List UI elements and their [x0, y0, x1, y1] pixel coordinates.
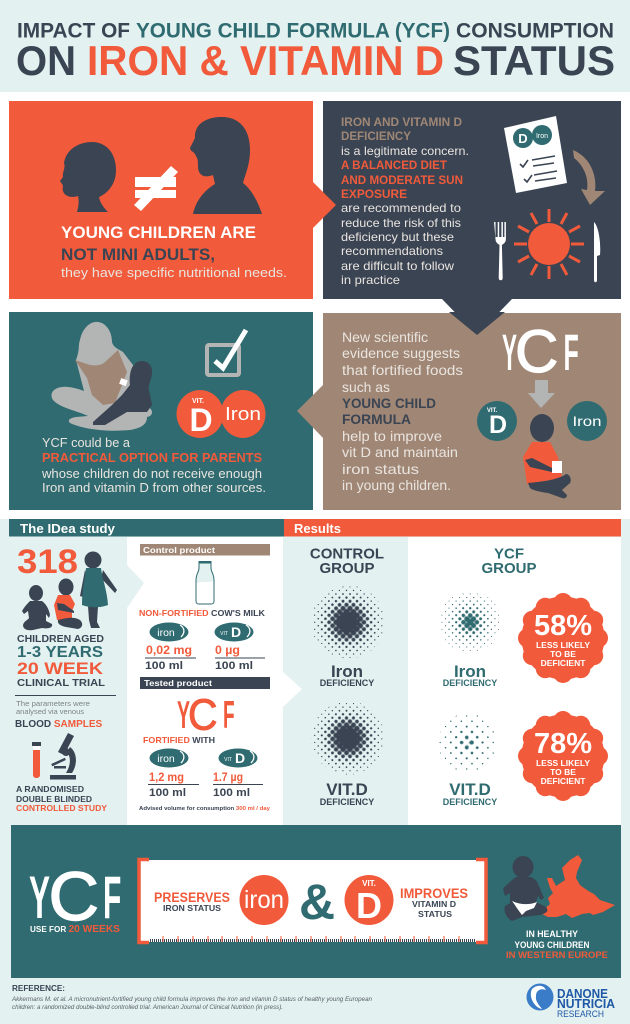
panel text: are recommended to: [341, 201, 461, 215]
heading: control group: [310, 546, 384, 577]
text: clinical trial: CLINICAL TRIAL: [17, 677, 106, 689]
pill: vit D tested: [218, 748, 258, 768]
dose: tested iron: 1,2 mg: [149, 770, 184, 784]
logo: YCF: Y: [502, 325, 517, 382]
pill: vit D: VIT: [220, 631, 228, 637]
dose: control vitamin D: [215, 643, 265, 672]
text: in healthy young children: IN HEALTHY: [526, 929, 579, 940]
dose: control vitamin D: 0 µg: [215, 643, 240, 657]
panel text: Iron and vitamin D from other sources.: [42, 481, 266, 495]
text: randomised study: DOUBLE BLINDED: [16, 794, 92, 804]
text: parameters note: BLOOD SAMPLES: [15, 719, 103, 730]
panel text: is a legitimate concern.: [341, 144, 469, 158]
text: non-fortified milk: NON-FORTIFIED COW'S MILK: [139, 608, 266, 618]
icon: checklist paper: Iron: [536, 133, 548, 140]
text: iron deficiency: Iron: [331, 662, 363, 681]
icon: mother and child: [51, 322, 152, 431]
badge: 58 percent: TO BE: [550, 649, 576, 659]
ampersand: &: [299, 874, 335, 930]
text: randomised study: A RANDOMISED: [16, 784, 84, 794]
panel text: are difficult to follow: [341, 259, 454, 273]
panel text: [61, 223, 287, 280]
panel text: in young children.: [342, 477, 451, 493]
text: advised volume: Advised volume for consumption 300 ml / day: [139, 806, 271, 812]
icon: blood tube: [32, 742, 41, 778]
heading: tested product: Tested product: [144, 678, 212, 688]
heading: control product: [140, 544, 270, 556]
icon: fork: [494, 222, 506, 280]
icon: seated child with cup: [523, 414, 571, 498]
text: vit D deficiency: [320, 780, 374, 807]
panel text: NOT MINI ADULTS,: [61, 245, 215, 264]
panel text: [41, 436, 266, 495]
stat: 318: 318: [17, 543, 78, 581]
logo: YCF orange: [177, 691, 235, 740]
text: in healthy young children: [506, 929, 608, 961]
halftone: YCF vitamin D: [438, 713, 498, 773]
logo: YCF: F: [564, 323, 579, 381]
arrow: column pointer: [127, 565, 144, 608]
text: iron deficiency: [320, 662, 374, 688]
pill: vit D tested: VIT: [224, 757, 232, 763]
panel text: evidence suggests: [342, 345, 460, 361]
panel: practical option: [9, 312, 313, 510]
pill: iron: [150, 622, 188, 642]
panel text: FORMULA: [342, 411, 411, 427]
logo: YCF orange: F: [223, 694, 235, 737]
text: 20 week: 20 WEEK: [17, 659, 104, 678]
dose: tested vitamin D: [213, 770, 263, 799]
title: IMPACT OF: [17, 20, 130, 42]
text: vit D deficiency: VIT.D: [326, 780, 368, 799]
logo: YCF white: [29, 857, 121, 935]
panel text: EXPOSURE: [341, 187, 407, 201]
text: randomised study: CONTROLLED STUDY: [16, 803, 107, 813]
panel text: A BALANCED DIET: [341, 158, 448, 172]
logo: YCF white: Y: [29, 865, 50, 932]
title: STATUS: [453, 37, 615, 84]
badge: 78 percent: 78%: [534, 728, 592, 760]
badge: 58 percent: DEFICIENT: [541, 658, 586, 668]
logo: YCF: C: [515, 318, 558, 385]
title: [16, 20, 615, 84]
icon: milk bottle: [196, 561, 214, 604]
panel text: in practice: [341, 273, 400, 287]
text: improves vitamin D status: STATUS: [418, 909, 452, 919]
pill: iron tested: [150, 748, 188, 768]
text: improves vitamin D status: [400, 886, 468, 919]
panel: scientific evidence: [297, 312, 621, 510]
text: iron deficiency: Iron: [454, 662, 486, 681]
text: randomised study: [16, 784, 107, 813]
icon: checklist paper: [504, 116, 567, 193]
panel text: [341, 115, 469, 287]
title: ON: [16, 37, 76, 84]
pill: iron tested: iron: [157, 753, 175, 765]
icon: baby: [503, 856, 547, 921]
section background: study: [0, 519, 630, 825]
icon: checklist paper: D: [518, 131, 528, 146]
text: vit D deficiency: DEFICIENCY: [443, 797, 497, 807]
heading: control group: GROUP: [319, 560, 375, 577]
text: improves vitamin D status: IMPROVES: [400, 886, 468, 901]
heading: the IDea study: The IDea study: [20, 522, 115, 536]
heading: results: [284, 519, 621, 536]
logo: Danone Nutricia Research: DANONE: [557, 986, 608, 1001]
icon: iron circle: iron: [244, 886, 284, 914]
text: preserves iron status: [154, 890, 230, 913]
panel text: IRON AND VITAMIN D: [341, 115, 462, 129]
title: YOUNG CHILD FORMULA (YCF): [136, 20, 450, 42]
study population column: [15, 543, 117, 813]
section background: conclusion and footer: [0, 825, 630, 1024]
icon: iron circle: Iron: [572, 413, 602, 429]
icon: vit D circle: D: [489, 411, 507, 439]
text: vit D deficiency: [443, 780, 497, 807]
icon: vit D circle: VIT.: [487, 408, 497, 414]
badge: 58 percent: [518, 593, 608, 683]
dose: tested iron: [148, 770, 199, 799]
arrow: down pointer: [442, 299, 512, 335]
text: parameters note: The parameters were: [16, 699, 90, 708]
badge: 78 percent: [518, 711, 608, 801]
logo: YCF white: F: [103, 865, 121, 932]
panel text: PRACTICAL OPTION FOR PARENTS: [42, 451, 262, 465]
panel text: recommendations: [341, 244, 443, 258]
icon: vit D circle: [344, 875, 394, 926]
panel text: vit D and maintain: [342, 444, 458, 460]
text: iron deficiency: DEFICIENCY: [443, 678, 497, 688]
icon: three children: [22, 552, 117, 630]
panel text: help to improve: [342, 428, 442, 444]
panel text: YOUNG CHILD: [342, 395, 436, 411]
header band: [0, 0, 630, 92]
badge: 78 percent: DEFICIENT: [541, 776, 586, 786]
panel text: YOUNG CHILDREN ARE: [61, 223, 256, 242]
panel text: deficiency but these: [341, 230, 454, 244]
arrow: right pointer from first panel: [313, 182, 336, 228]
logo: Danone Nutricia Research: RESEARCH: [557, 1009, 604, 1019]
arrow: dark pointer tip overlay: [449, 312, 505, 335]
text: fortified with: FORTIFIED WITH: [143, 735, 215, 745]
logo: YCF orange: Y: [177, 693, 190, 737]
title: CONSUMPTION: [456, 20, 614, 42]
arrow: left pointer: [297, 385, 323, 438]
text: iron deficiency: DEFICIENCY: [320, 678, 374, 688]
text: improves vitamin D status: VITAMIN D: [412, 899, 456, 909]
reference: REFERENCE:: [12, 984, 65, 993]
heading: YCF group: GROUP: [481, 560, 537, 577]
pill: iron: iron: [157, 627, 175, 639]
reference: children: a randomized double-blind controlled trial. American Journal of Clinical Nutrition (in press).: [12, 1005, 283, 1011]
text: vit D deficiency: VIT.D: [449, 780, 491, 799]
panel text: AND MODERATE SUN: [341, 173, 463, 187]
dose: tested vitamin D: 1.7 µg: [213, 770, 243, 784]
white column: YCF results: [408, 537, 621, 825]
icon: adult head silhouette: [190, 117, 262, 214]
logo: YCF white: C: [48, 857, 99, 935]
panel text: they have specific nutritional needs.: [61, 265, 287, 280]
heading: YCF group: [481, 546, 537, 577]
panel text: reduce the risk of this: [341, 216, 461, 230]
results: control group: [310, 546, 385, 807]
badge: 58 percent: 58%: [534, 610, 592, 642]
icon: not equal sign: [134, 166, 178, 211]
halftone: control iron: [311, 585, 385, 659]
arrow: gray down arrow: [528, 380, 555, 408]
dose: control iron: 100 ml: [145, 660, 183, 672]
icon: vit D and iron circles: D: [189, 402, 213, 438]
panel text: YCF could be a: [42, 436, 130, 450]
dose: control iron: 0,02 mg: [146, 643, 192, 657]
icon: iron circle: [240, 875, 288, 925]
text: in healthy young children: YOUNG CHILDREN: [514, 940, 590, 951]
panel text: DEFICIENCY: [341, 129, 411, 143]
arrow: curved down arrow: [573, 150, 605, 205]
panel: deficiency concern: [313, 101, 621, 335]
icon: vit D circle: [477, 401, 517, 441]
icon: iron circle: [567, 401, 607, 441]
dose: control iron: [145, 643, 196, 672]
panel text: [342, 329, 463, 493]
icon: sun: [514, 209, 584, 279]
panel text: New scientific: [342, 329, 428, 345]
reference: Akkermans M. et al. A micronutrient-fortified young child formula improves the iron and vitamin D status of healthy young European: [11, 997, 373, 1003]
text: 1-3 years: 1-3 YEARS: [17, 644, 103, 661]
panel text: whose children do not receive enough: [41, 467, 262, 481]
text: parameters note: [15, 699, 103, 730]
logo: YCF orange: C: [188, 691, 218, 740]
white column: products: [127, 537, 283, 825]
text: use for 20 weeks: USE FOR 20 WEEKS: [30, 924, 120, 935]
heading: YCF group: YCF: [494, 546, 524, 562]
dose: tested vitamin D: 100 ml: [213, 787, 250, 799]
badge: 78 percent: TO BE: [550, 767, 576, 777]
product column: [139, 544, 271, 812]
icon: vit D circle: D: [356, 885, 382, 926]
icon: checkbox: [207, 330, 246, 375]
text: vit D deficiency: DEFICIENCY: [320, 797, 374, 807]
icon: vit D and iron circles: VIT.: [192, 398, 204, 405]
panel text: that fortified foods: [342, 362, 463, 378]
pill: vit D: [214, 622, 254, 642]
badge: 58 percent: LESS LIKELY: [536, 640, 590, 650]
dose: tested iron: 100 ml: [149, 787, 186, 799]
panel text: iron status: [342, 461, 419, 477]
panel: conclusion: [11, 825, 621, 978]
text: preserves iron status: IRON STATUS: [163, 903, 221, 913]
heading: control group: CONTROL: [310, 546, 384, 562]
icon: vit D and iron circles: [176, 390, 266, 438]
heading: control product: Control product: [143, 545, 215, 555]
halftone: YCF iron: [439, 591, 501, 653]
pill: vit D tested: D: [235, 750, 245, 766]
reference: [11, 984, 373, 1011]
pill: vit D: D: [231, 624, 241, 640]
text: iron deficiency: [443, 662, 497, 688]
heading: results: Results: [294, 522, 341, 536]
logo: YCF: [502, 318, 579, 385]
badge: 78 percent: LESS LIKELY: [536, 758, 590, 768]
map: Europe: [540, 855, 615, 918]
heading: tested product: [140, 677, 270, 689]
icon: child head silhouette: [60, 142, 116, 212]
arrow: white results pointer: [283, 672, 302, 707]
panel: not mini adults: [9, 101, 313, 299]
text: parameters note: analysed via venous: [16, 707, 84, 716]
halftone: control vitamin D: [311, 701, 385, 775]
results: YCF group: [438, 546, 608, 807]
panel text: such as: [342, 379, 390, 395]
logo: Danone Nutricia Research: [526, 984, 616, 1019]
icon: knife: [594, 222, 600, 282]
icon: microscope: [50, 733, 76, 780]
ruler box: benefits: [139, 860, 486, 942]
heading: the IDea study: [9, 519, 284, 536]
icon: vit D and iron circles: Iron: [225, 404, 261, 424]
title: IRON & VITAMIN D: [87, 37, 444, 84]
icon: vit D circle: VIT.: [362, 879, 376, 888]
dose: control vitamin D: 100 ml: [215, 660, 253, 672]
text: children aged: CHILDREN AGED: [17, 634, 104, 645]
logo: Danone Nutricia Research: NUTRICIA: [557, 996, 616, 1011]
text: preserves iron status: PRESERVES: [154, 890, 230, 905]
text: in healthy young children: IN WESTERN EUROPE: [506, 950, 608, 961]
